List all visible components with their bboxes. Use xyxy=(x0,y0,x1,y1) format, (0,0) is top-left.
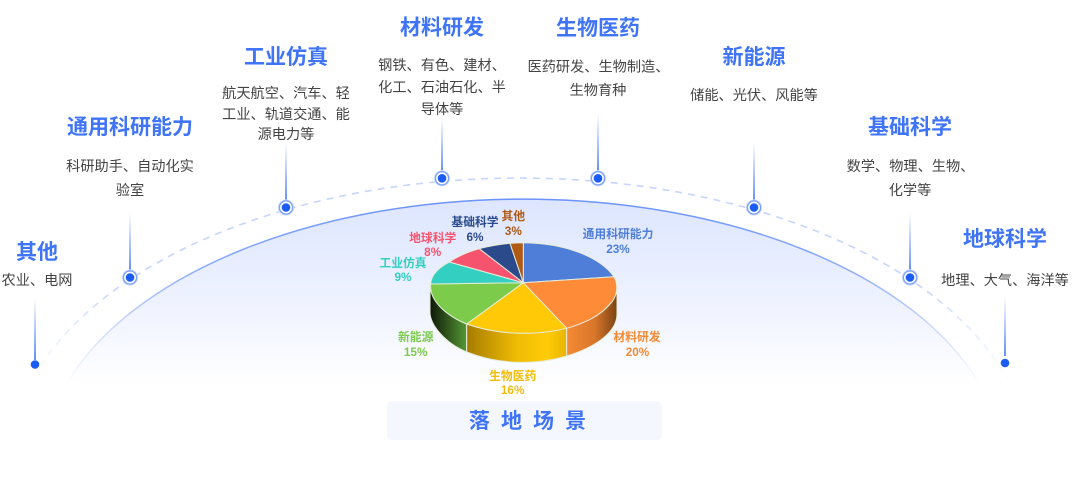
slice: 新能源 xyxy=(431,283,523,324)
scenario: 通用科研能力: 科研助手、自动化实 xyxy=(66,159,194,175)
scenario: 生物医药: 医药研发、生物制造、 xyxy=(528,60,669,76)
slice: 工业仿真 xyxy=(431,262,523,284)
pie label: 通用科研能力: 23% xyxy=(606,242,630,256)
scenario: 基础科学: 基础科学 xyxy=(868,115,952,139)
dashed arc xyxy=(28,178,1012,388)
side: orange xyxy=(567,287,617,356)
pie label: 通用科研能力 xyxy=(583,227,653,256)
pie label: 生物医药 xyxy=(489,369,536,397)
caption: 落地场景 xyxy=(387,401,662,440)
scenario: 工业仿真: 工业、轨道交通、能 xyxy=(222,106,350,123)
scenario: 材料研发 xyxy=(378,16,506,186)
scenario: 其他: 农业、电网 xyxy=(2,273,72,289)
slice: 材料研发 xyxy=(523,277,617,328)
pie label: 其他: 其他 xyxy=(501,209,525,223)
slice: 通用科研能力 xyxy=(523,243,614,283)
pie label: 其他 xyxy=(501,209,525,238)
pie label: 通用科研能力: 通用科研能力 xyxy=(583,227,653,241)
scenario: 其他: 其他 xyxy=(16,241,58,264)
pie label: 其他: 3% xyxy=(505,224,522,238)
pie label: 新能源: 15% xyxy=(404,345,428,359)
scenario: 地球科学: 地理、大气、海洋等 xyxy=(941,272,1069,289)
scenario: 材料研发: 化工、石油石化、半 xyxy=(378,80,506,96)
pie label: 生物医药: 生物医药 xyxy=(489,369,536,383)
pie label: 材料研发: 材料研发 xyxy=(613,330,661,344)
pie label: 生物医药: 16% xyxy=(501,383,525,397)
pie label: 工业仿真: 工业仿真 xyxy=(379,256,427,270)
scenario: 生物医药: 生物育种 xyxy=(570,83,626,99)
scenario: 工业仿真 xyxy=(222,46,350,215)
pie label: 新能源 xyxy=(398,330,434,359)
scenario: 地球科学 xyxy=(941,227,1069,367)
scenario: 材料研发: 钢铁、有色、建材、 xyxy=(378,57,506,74)
scenario: 基础科学: 数学、物理、生物、 xyxy=(847,159,974,175)
scenario: 新能源: 储能、光伏、风能等 xyxy=(690,87,818,104)
pie label: 材料研发 xyxy=(613,330,661,359)
pie label: 地球科学 xyxy=(409,231,456,259)
side: yellow xyxy=(467,324,567,362)
pie label: 工业仿真 xyxy=(379,256,427,284)
scenario: 生物医药 xyxy=(528,17,669,186)
scenario: 新能源 xyxy=(690,45,818,215)
slice: 生物医药 xyxy=(467,283,567,333)
scenario: 基础科学 xyxy=(847,115,974,285)
pie label: 地球科学: 地球科学 xyxy=(409,231,456,245)
scenario: 地球科学: 地球科学 xyxy=(963,227,1047,251)
scenario: 基础科学: 化学等 xyxy=(889,182,931,199)
dome background xyxy=(67,199,979,383)
pie label: 地球科学: 8% xyxy=(424,245,442,259)
scenario: 通用科研能力 xyxy=(66,116,194,285)
pie label: 基础科学: 基础科学 xyxy=(451,215,499,229)
caption: 落地场景: 落地场景 xyxy=(469,410,597,433)
pie label: 新能源: 新能源 xyxy=(398,330,434,344)
scenario: 工业仿真: 航天航空、汽车、轻 xyxy=(222,85,350,102)
scenario: 其他 xyxy=(2,241,72,369)
pie chart xyxy=(430,243,617,362)
pie label: 基础科学 xyxy=(451,215,499,244)
pie label: 材料研发: 20% xyxy=(626,345,650,359)
scenario: 通用科研能力: 验室 xyxy=(116,182,144,199)
slice: 基础科学 xyxy=(479,243,523,283)
scenario: 通用科研能力: 通用科研能力 xyxy=(67,116,193,139)
scenario: 新能源: 新能源 xyxy=(722,45,786,69)
pie label: 基础科学: 6% xyxy=(466,230,484,244)
scenario: 生物医药: 生物医药 xyxy=(556,17,640,40)
scenario: 材料研发: 导体等 xyxy=(421,101,463,118)
slice: 其他 xyxy=(510,243,523,283)
pie label: 工业仿真: 9% xyxy=(394,270,412,284)
scenario: 工业仿真: 源电力等 xyxy=(258,126,314,143)
scenario: 工业仿真: 工业仿真 xyxy=(244,46,328,69)
side: green xyxy=(430,284,467,352)
slice: 地球科学 xyxy=(449,249,523,283)
scenario: 材料研发: 材料研发 xyxy=(400,16,484,40)
